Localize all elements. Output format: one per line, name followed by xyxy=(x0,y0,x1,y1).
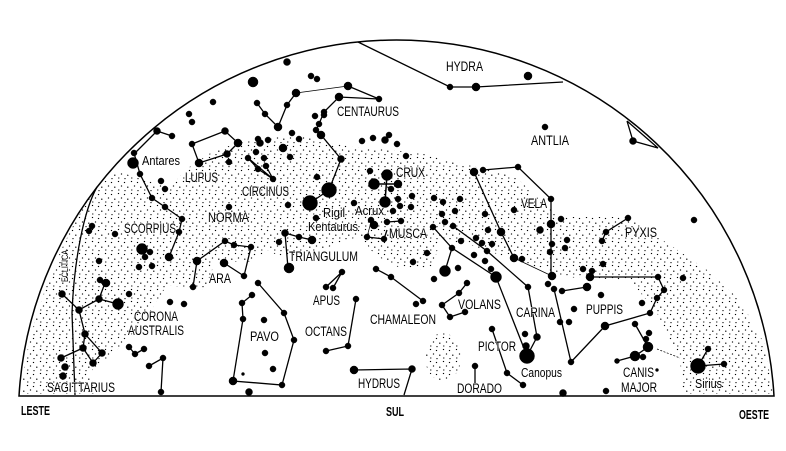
constellation and star labels: SAGITTARIUS xyxy=(47,380,115,395)
constellation and star labels: PYXIS xyxy=(625,225,657,240)
constellation and star labels: CANIS xyxy=(623,365,654,380)
constellation: Crux xyxy=(367,153,415,214)
constellation and star labels: CARINA xyxy=(516,305,555,320)
constellation: Pyxis xyxy=(599,215,697,244)
constellation and star labels: NORMA xyxy=(208,210,249,225)
constellation and star labels: CENTAURUS xyxy=(337,104,399,119)
constellation: Centaurus xyxy=(186,58,400,221)
constellation and star labels: VOLANS xyxy=(458,297,501,312)
constellation: Scorpius xyxy=(86,128,232,270)
constellation and star labels: PAVO xyxy=(250,329,279,344)
constellation and star labels: PICTOR xyxy=(478,339,516,354)
horizon arc and baseline xyxy=(19,40,774,396)
constellation and star labels: CORONA xyxy=(134,309,178,324)
milky way stippled band xyxy=(21,135,773,394)
constellation: Pictor xyxy=(489,326,526,388)
cardinal direction: west: OESTE xyxy=(739,408,769,422)
constellation: Dorado xyxy=(472,363,609,396)
constellation: Apus xyxy=(323,269,345,291)
constellation and star labels: CHAMALEON xyxy=(370,312,436,327)
constellation and star labels: Sirius xyxy=(695,376,722,391)
constellation and star labels: MUSCA xyxy=(389,226,427,241)
constellation and star labels: Acrux xyxy=(355,203,384,218)
constellation and star labels: AUSTRALIS xyxy=(128,323,184,338)
constellation: Sagittarius xyxy=(58,277,132,380)
constellation and star labels: MAJOR xyxy=(621,380,657,395)
cardinal direction: east: LESTE xyxy=(21,404,50,418)
constellation and star labels: Antares xyxy=(142,153,180,168)
constellation: Octans xyxy=(323,296,359,354)
constellation: Volans xyxy=(439,280,470,320)
constellation and star labels: CRUX xyxy=(396,165,425,180)
constellation and star labels: Canopus xyxy=(521,365,562,380)
constellation: Chamaleon xyxy=(373,266,426,307)
constellation: Corona Australis xyxy=(126,299,187,395)
constellation and star labels: TRIANGULUM xyxy=(289,249,358,264)
constellation and star labels: OCTANS xyxy=(305,324,347,339)
constellation: Hydrus xyxy=(350,366,416,395)
constellation and star labels: Rigil xyxy=(323,205,345,220)
constellation: Pavo xyxy=(229,280,297,396)
constellation: Puppis xyxy=(545,261,686,365)
large magellanic cloud stipple xyxy=(425,333,461,381)
constellation: Triangulum xyxy=(276,230,316,273)
ecliptic label: ECLITICA xyxy=(60,250,70,282)
constellation and star labels: APUS xyxy=(313,293,340,308)
constellation and star labels: DORADO xyxy=(457,381,502,396)
constellation: Ara xyxy=(190,238,254,290)
constellation and star labels xyxy=(47,59,722,396)
ecliptic line xyxy=(60,187,97,395)
constellation: Canis Major xyxy=(614,321,727,374)
constellation and star labels: ARA xyxy=(209,271,231,286)
cardinal direction: south: SUL xyxy=(386,405,404,419)
constellation and star labels: HYDRA xyxy=(446,59,483,74)
constellation and star labels: PUPPIS xyxy=(586,302,623,317)
constellation: Hydra xyxy=(358,42,563,91)
constellation and star labels: ANTLIA xyxy=(531,133,569,148)
constellation and star labels: VELA xyxy=(521,196,547,211)
constellation: Lupus xyxy=(169,128,242,167)
constellation and star labels: HYDRUS xyxy=(358,376,400,391)
constellation: Musca xyxy=(364,217,430,265)
constellation: Circinus xyxy=(245,130,302,182)
constellation: Antlia xyxy=(542,121,658,148)
constellation and star labels: CIRCINUS xyxy=(242,184,289,199)
constellation and star labels: SCORPIUS xyxy=(124,221,176,236)
constellation and star labels: LUPUS xyxy=(185,170,218,185)
constellation: Vela xyxy=(470,164,570,280)
constellation and star labels: Kentaurus xyxy=(308,219,358,234)
constellation: Carina xyxy=(430,172,540,364)
